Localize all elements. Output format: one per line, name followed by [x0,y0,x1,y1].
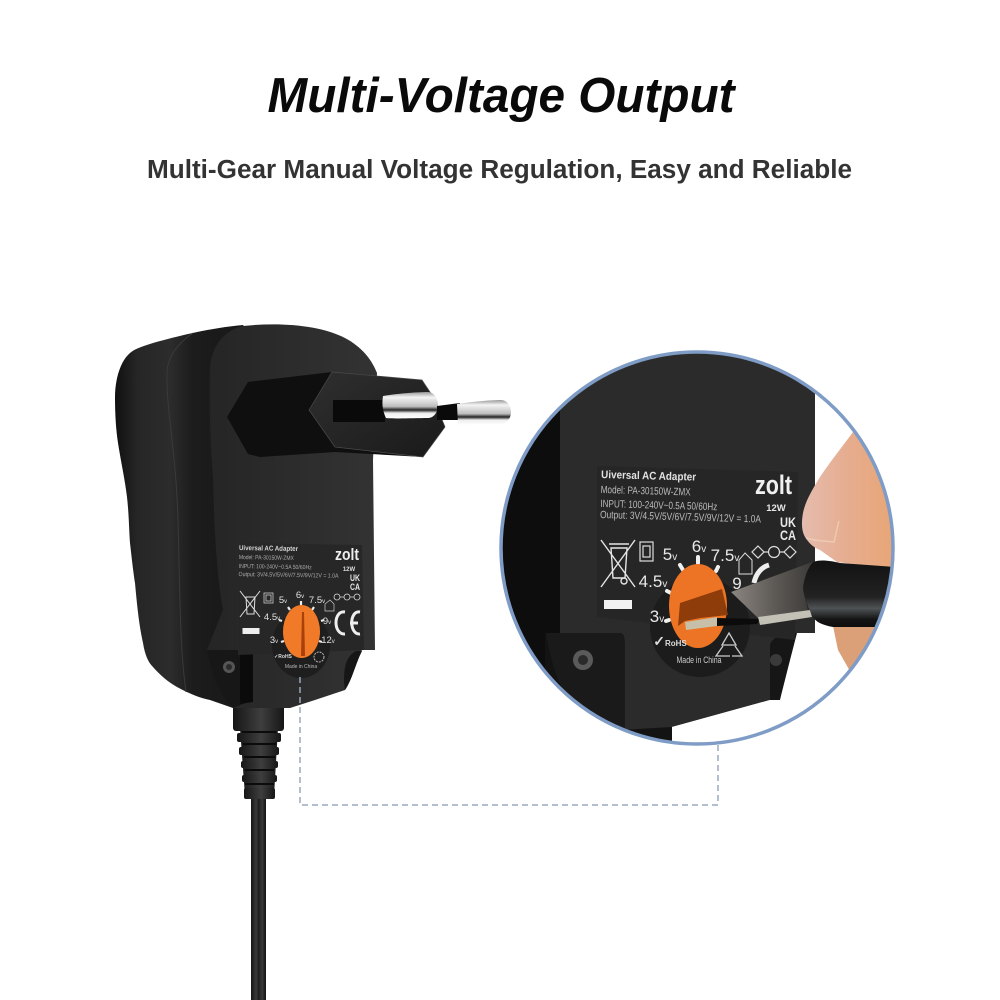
screw [573,650,593,670]
tool handle [803,560,895,627]
voltage labels: 6v [296,590,304,601]
dial recess [272,612,330,678]
UKCA mark: CA [780,527,796,543]
voltage labels: 12v [321,635,335,646]
blade [731,561,815,618]
orange dial [283,605,320,658]
wattage: 12W [343,567,356,573]
icon: polarity [334,594,360,600]
strain relief [233,705,284,799]
label panel [776,633,795,640]
plug base [227,372,445,457]
label text: Uiversal AC Adapter [239,545,298,553]
voltage labels: 6v [692,537,706,556]
cap inner shadow [240,654,253,704]
label text: Output: 3V/4.5V/5V/6V/7.5V/9V/12V = 1.0A [600,509,761,525]
origin: Made in China [676,655,722,665]
tool shaft [717,618,760,626]
lower pin [437,400,511,425]
icon: house [325,600,334,611]
bottom left screw cap [207,650,253,708]
front face [207,324,377,708]
brand: zolt [335,545,359,564]
icon: polarity [752,546,796,558]
upper pin [333,392,438,422]
bottom right screw cap [344,651,362,690]
title: Multi-Voltage Output [268,69,736,123]
bottom wedge [672,700,770,727]
voltage labels [639,537,742,626]
screw [223,661,235,673]
finger crease [806,521,839,542]
brand: zolt [755,470,792,500]
CE fragment [754,565,769,583]
icon: recycle [314,652,324,662]
voltage labels: 5v [279,595,287,606]
voltage labels: 7.5v [309,595,325,606]
icon: house [739,553,752,574]
dial recess [650,577,750,677]
label text: Output: 3V/4.5V/5V/6V/7.5V/9V/12V = 1.0A [238,572,339,580]
voltage labels: 3v [650,607,664,626]
UKCA mark [780,518,796,540]
voltage labels: 3v [270,635,278,646]
dial ticks [666,557,718,621]
adapter: small full view [115,324,511,708]
icon: double insulation [640,542,653,561]
circle border [501,352,893,744]
plug face [309,372,445,457]
right screw cap [770,633,797,700]
UKCA mark: UK [780,514,796,530]
finger [802,432,892,567]
label text [600,469,762,525]
orange dial [669,564,728,648]
label text: Model: PA-30150W-ZMX [239,555,294,562]
shading below [560,684,672,740]
voltage labels: 9 [732,574,742,593]
subtitle: Multi-Gear Manual Voltage Regulation, Easy and Reliable [147,156,852,184]
dark side of housing [502,410,560,669]
white bar [604,600,632,609]
UKCA mark lower: CA [350,582,360,592]
silver bar [758,610,812,625]
infographic canvas [115,76,895,1000]
label text [238,545,339,580]
icon: weee bin [601,540,635,587]
right screw [770,654,782,666]
label panel [238,543,364,655]
label text: INPUT: 100-240V~0.5A 50/60Hz [600,498,717,513]
zoom circle [495,345,900,760]
voltage labels: 7.5v [711,546,739,565]
icon: CE mark [336,612,360,634]
wattage: 12W [766,503,786,514]
RoHS: ✓RoHS [274,654,293,660]
rear housing [115,325,300,708]
left screw cap [620,633,625,728]
voltage labels: 4.5v [264,612,280,623]
icon: weee bin [240,591,260,634]
label text: Uiversal AC Adapter [601,469,697,484]
origin: Made in China [285,664,317,670]
label text: Model: PA-30150W-ZMX [601,484,691,499]
voltage labels: 5v [663,545,677,564]
lower finger [833,627,874,670]
voltage labels [264,590,335,646]
faceplate [560,345,815,750]
housing seam [167,333,193,692]
voltage labels: 9v [323,616,331,627]
UKCA mark: UK [350,573,360,583]
dial ticks [279,601,324,642]
connector dashed line [300,677,718,805]
power cord [233,705,284,1000]
RoHS: ✓RoHS [653,633,687,649]
icon: recycle [716,633,742,656]
icon: double insulation [264,593,273,603]
label text: INPUT: 100-240V~0.5A 50/60Hz [239,564,312,571]
voltage labels: 4.5v [639,572,667,591]
